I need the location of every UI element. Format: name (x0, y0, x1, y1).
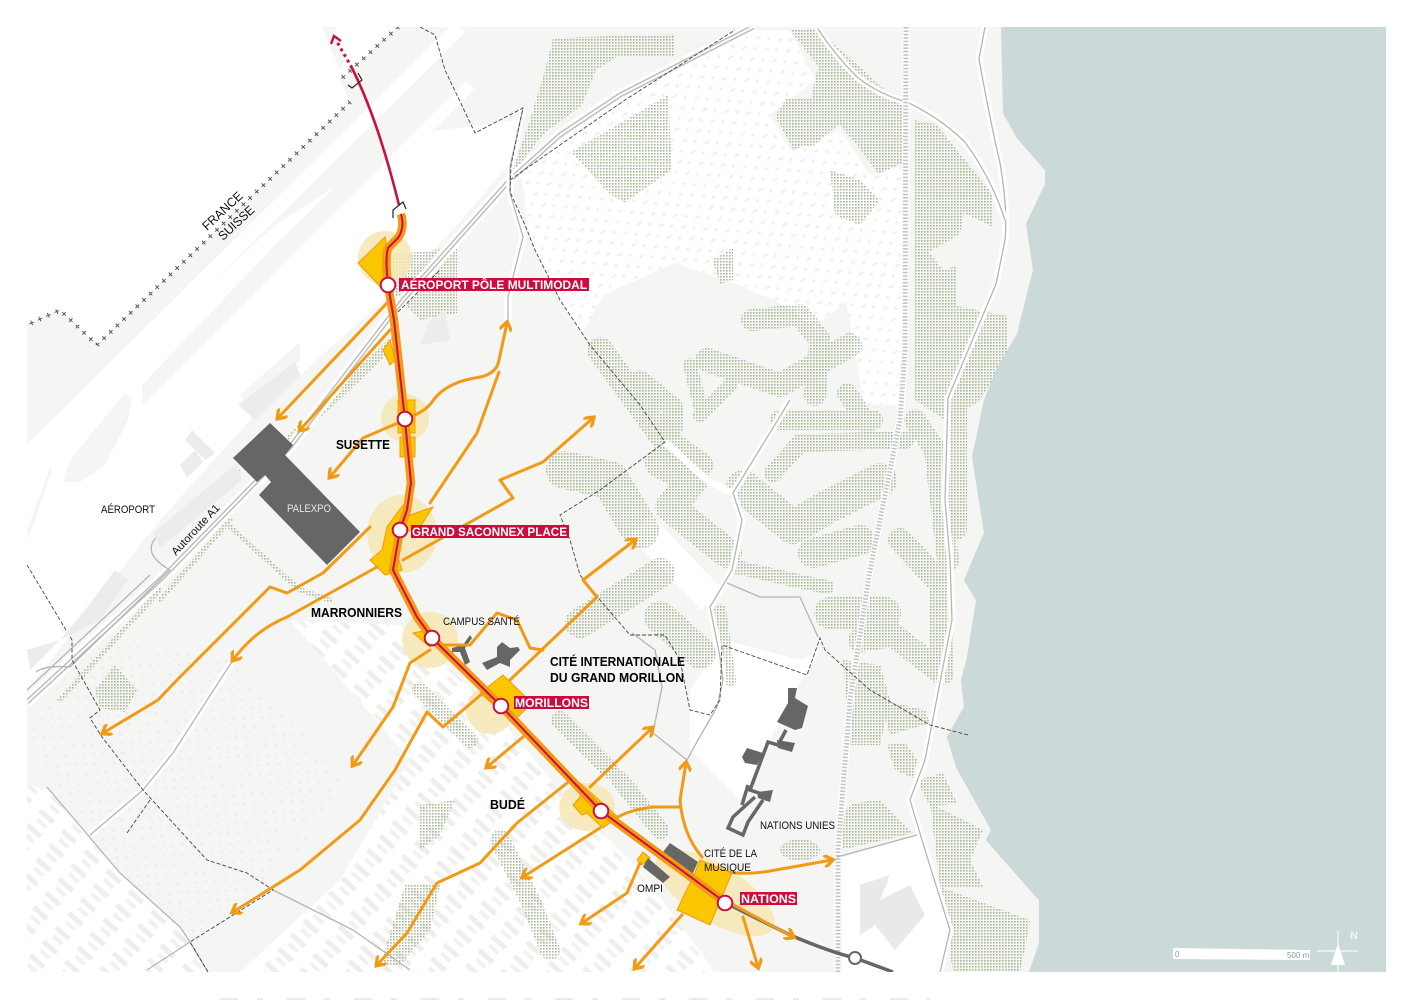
label: Nations Unies: NATIONS UNIES (760, 820, 835, 832)
label: OMPI: OMPI (637, 883, 663, 895)
label: Autoroute A1: Autoroute A1 (169, 502, 223, 558)
building: OMPI (643, 858, 670, 883)
existing tram line to Nations and east (726, 903, 893, 972)
lake (948, 27, 1386, 972)
building: Nations Unies (728, 688, 808, 835)
green vegetation areas (60, 29, 1030, 972)
label: Marronniers: MARRONNIERS (311, 606, 402, 620)
label: Cité internationale du Grand Morillon: CITÉ INTERNATIONALE (550, 654, 685, 669)
label: Suisse: SUISSE (215, 203, 257, 243)
building: campus santé (452, 635, 520, 670)
road network (27, 27, 1006, 972)
France-Switzerland border crosses (27, 27, 398, 345)
main tram line (331, 36, 726, 903)
label: Cité internationale du Grand Morillon (550, 654, 685, 685)
label: Cité internationale du Grand Morillon: DU GRAND MORILLON (550, 671, 684, 685)
label: France: FRANCE (199, 189, 246, 233)
municipal boundary dashed lines (27, 27, 968, 972)
orange pedestrian arrows (103, 303, 832, 968)
label: Aéroport: AÉROPORT (101, 503, 155, 516)
station halos (358, 231, 788, 953)
station label: Nations: NATIONS (741, 892, 796, 906)
scale bar: 0 (1175, 950, 1180, 959)
label: Cité de la Musique (704, 847, 758, 874)
tunnel portals (348, 73, 406, 218)
north arrow: N (1350, 930, 1358, 942)
label: Cité de la Musique: CITÉ DE LA (704, 847, 758, 860)
label: Cité de la Musique: MUSIQUE (704, 862, 751, 874)
label: Campus Santé: CAMPUS SANTÉ (443, 615, 520, 628)
north arrow (1317, 930, 1358, 972)
station label: Morillons: MORILLONS (515, 696, 588, 710)
label: Susette: SUSETTE (336, 438, 390, 452)
scale bar (1173, 948, 1310, 960)
station markers (381, 278, 732, 910)
building: Palexpo (233, 423, 360, 565)
building footprints: airport grey blocks (27, 310, 450, 670)
airport land and white urban areas (27, 27, 950, 972)
label: Budé: BUDÉ (490, 797, 525, 812)
building: Cité de la Musique (663, 843, 698, 875)
label: Palexpo: PALEXPO (287, 503, 331, 515)
station label: Aéroport Pôle Multimodal: AÉROPORT PÔLE MULTIMODAL (401, 277, 587, 292)
station platforms (yellow) (358, 237, 732, 925)
landmark buildings (233, 423, 808, 883)
station label: Grand Saconnex Place: GRAND SACONNEX PLACE (412, 525, 567, 539)
scale bar: 500 m (1287, 951, 1310, 960)
